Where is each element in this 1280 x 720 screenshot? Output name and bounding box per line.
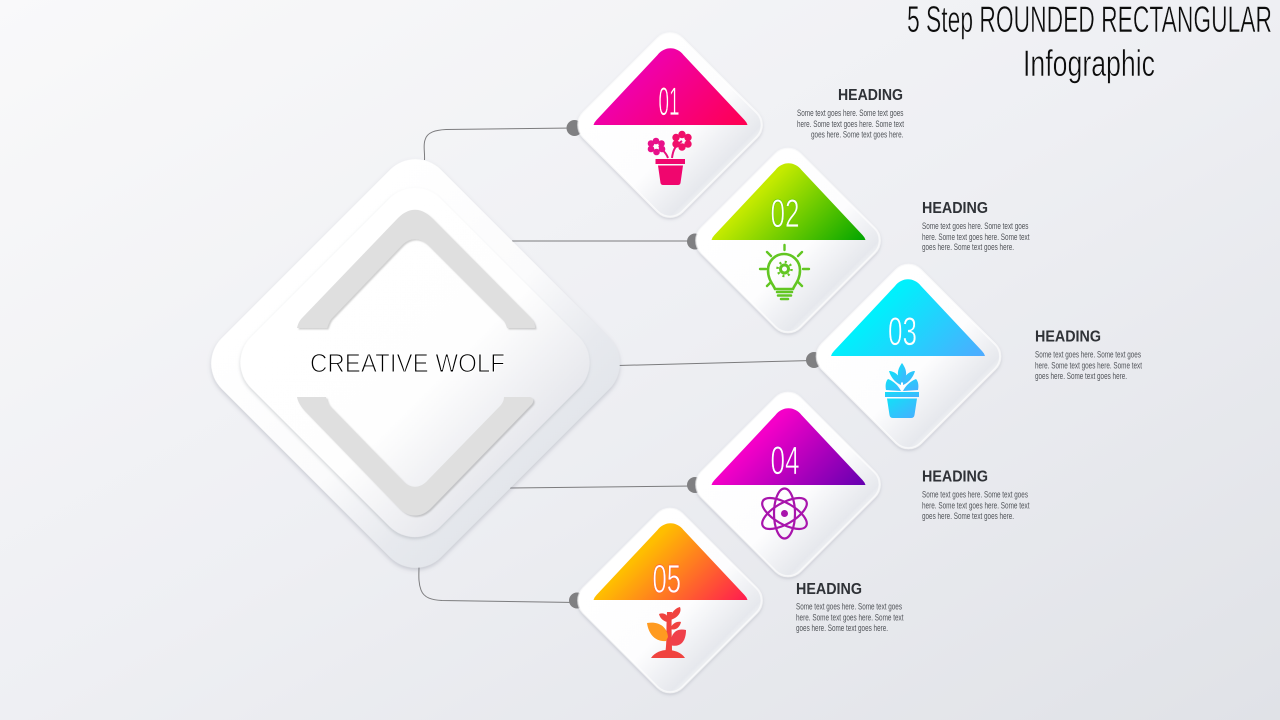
body text 4: Some text goes here. Some text goes	[922, 490, 1028, 500]
card 4 number: 04	[770, 439, 800, 483]
card 2 triangle	[712, 163, 866, 240]
body text 3: goes here. Some text goes here.	[1035, 371, 1127, 382]
title: Infographic	[1023, 42, 1155, 84]
body text 4	[922, 490, 1030, 522]
icon: flower pot	[648, 131, 692, 185]
body text 1	[797, 108, 904, 140]
heading 2	[922, 200, 1030, 253]
card 5 number: 05	[652, 558, 681, 602]
connector 3	[618, 352, 822, 368]
icon: light bulb	[760, 245, 809, 299]
body text 3	[1035, 350, 1142, 382]
top grey chevron	[297, 210, 535, 328]
icon: seedling	[647, 607, 686, 658]
step card 1	[571, 26, 769, 224]
inner diamond	[225, 173, 605, 552]
card 3 number: 03	[888, 310, 917, 354]
body text 1: here. Some text goes here. Some text	[797, 119, 904, 130]
body text 2: Some text goes here. Some text goes	[922, 221, 1029, 232]
connector 1	[424, 120, 582, 160]
card 3 body	[810, 258, 1007, 455]
card 4 body	[689, 386, 887, 583]
step card 1: 01	[658, 80, 680, 124]
body text 5: Some text goes here. Some text goes	[796, 602, 902, 612]
body text 2	[922, 221, 1030, 253]
card 2 number: 02	[770, 192, 800, 236]
bottom grey chevron	[297, 397, 533, 516]
step card 2	[689, 142, 887, 339]
card 5 triangle	[594, 523, 748, 600]
outer diamond	[196, 144, 635, 583]
central diamond panel	[196, 144, 635, 583]
title	[907, 0, 1272, 84]
heading 3: HEADING	[1035, 328, 1101, 346]
card 3 triangle	[831, 279, 985, 356]
card 1 triangle	[594, 48, 748, 125]
connector 5	[419, 566, 585, 608]
heading 3	[1035, 328, 1142, 382]
card 1 body	[571, 26, 769, 224]
body text 5	[796, 602, 904, 634]
body text 4: here. Some text goes here. Some text	[922, 500, 1030, 512]
body text 4: goes here. Some text goes here.	[922, 511, 1014, 522]
body text 3: here. Some text goes here. Some text	[1035, 360, 1142, 372]
body text 1: Some text goes here. Some text goes	[797, 108, 904, 119]
connector 4	[510, 477, 703, 493]
icon: atom	[758, 488, 811, 538]
heading 4	[922, 468, 1030, 522]
heading 5	[796, 581, 904, 634]
body text 2: here. Some text goes here. Some text	[922, 232, 1030, 243]
step card 4	[689, 386, 887, 583]
step card 5	[571, 502, 769, 699]
step card 3	[810, 258, 1007, 455]
card 4 triangle	[712, 408, 866, 485]
body text 5: goes here. Some text goes here.	[796, 623, 888, 634]
body text 3: Some text goes here. Some text goes	[1035, 350, 1141, 360]
card 2 body	[689, 142, 887, 339]
heading 2: HEADING	[922, 200, 988, 217]
brand name: CREATIVE WOLF	[310, 350, 505, 378]
connector 2	[512, 234, 703, 250]
body text 5: here. Some text goes here. Some text	[796, 612, 904, 624]
heading 1	[797, 87, 904, 140]
card 5 body	[571, 502, 769, 699]
heading 5: HEADING	[796, 581, 862, 598]
heading 4: HEADING	[922, 468, 988, 486]
icon: succulent	[885, 363, 919, 418]
body text 1: goes here. Some text goes here.	[811, 130, 904, 140]
heading 1: HEADING	[838, 87, 903, 104]
body text 2: goes here. Some text goes here.	[922, 242, 1014, 253]
